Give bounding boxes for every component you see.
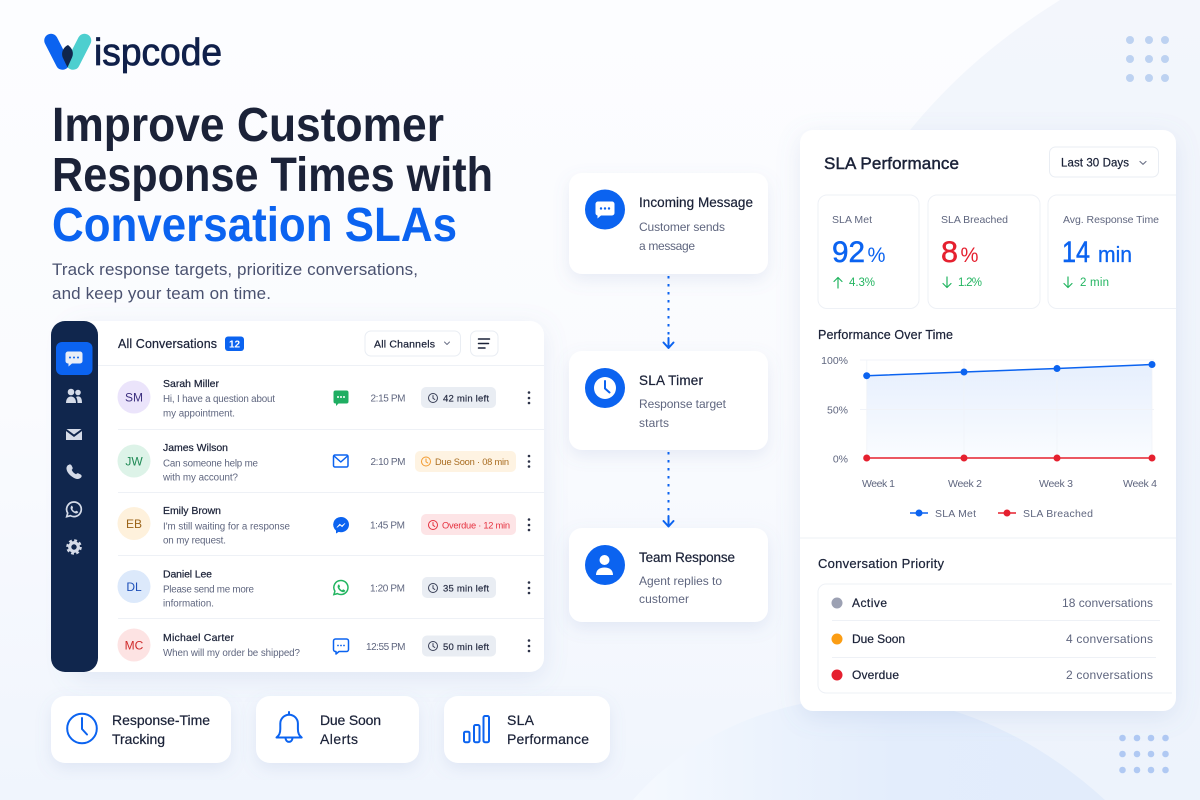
date dropdown (1050, 147, 1158, 177)
row: Daniel Lee: 35 min left (443, 584, 489, 594)
title: Conversation SLAs (52, 199, 457, 252)
feature card: response-time tracking: Response-Time (112, 712, 210, 728)
line chart: performance over time (821, 355, 1157, 490)
chart legend: SLA Met (935, 508, 976, 520)
icon: people (66, 389, 82, 403)
row: Emily Brown: 1:45 PM (370, 520, 405, 532)
row: Michael Carter: 50 min left (443, 642, 489, 653)
metric: sla breached: 1.2% (958, 277, 982, 289)
feature card: sla performance: Performance (507, 731, 589, 747)
decorative dots: top right (1126, 36, 1169, 82)
decorative dots: bottom right (1119, 735, 1169, 773)
date dropdown: Last 30 Days (1061, 158, 1129, 170)
arrow: timer to response (664, 452, 674, 526)
flow step: sla timer (569, 351, 768, 450)
row: Daniel Lee: information. (163, 598, 214, 610)
metric: sla breached: 8 (941, 236, 958, 269)
feature card: sla performance (444, 696, 610, 763)
metric: avg response time (1048, 195, 1176, 308)
subtitle (52, 260, 418, 303)
row: Emily Brown (118, 505, 530, 546)
flow step: incoming message: a message (639, 239, 695, 253)
icon: messenger (333, 517, 349, 534)
row: James Wilson: James Wilson (163, 442, 228, 454)
priority list: 2 conversations (1066, 668, 1153, 682)
subtitle: and keep your team on time. (52, 284, 271, 303)
priority list: Overdue (852, 668, 899, 682)
icon: chat (66, 352, 82, 366)
row: Daniel Lee (118, 568, 530, 610)
metric: avg response time: 2 min (1080, 277, 1109, 289)
flow step: incoming message (569, 173, 768, 274)
row: Sarah Miller: Sarah Miller (163, 378, 220, 390)
icon: phone (66, 464, 82, 479)
icon: bell (276, 712, 302, 742)
metric: sla met: 92 (832, 236, 865, 269)
metric: sla met (818, 195, 919, 308)
feature card: due soon alerts (256, 696, 419, 763)
icon: bars (464, 716, 489, 742)
icon: email (334, 455, 348, 467)
row: Sarah Miller: my appointment. (163, 408, 235, 420)
row: Emily Brown: Emily Brown (163, 505, 221, 517)
row: Michael Carter: 12:55 PM (366, 642, 406, 653)
metric: sla breached: % (960, 244, 978, 267)
row: Sarah Miller: 2:15 PM (370, 394, 406, 404)
row: Daniel Lee: DL (126, 580, 142, 594)
feature card: due soon alerts: Due Soon (320, 712, 381, 728)
row: James Wilson: 2:10 PM (370, 457, 406, 468)
metric: sla met: % (868, 244, 886, 267)
table header (118, 331, 498, 356)
icon: mail (66, 429, 82, 440)
line chart: performance over time: 50% (827, 404, 848, 416)
priority list: 4 conversations (1066, 632, 1153, 646)
priority list: Due Soon (852, 632, 905, 646)
chart heading: Performance Over Time (818, 328, 953, 342)
line chart: performance over time: Week 4 (1123, 478, 1157, 490)
flow step: sla timer: Response target (639, 397, 727, 411)
logo (51, 32, 222, 74)
row: Michael Carter (118, 628, 530, 662)
title: Response Times with (52, 149, 493, 202)
row: Sarah Miller: Hi, I have a question about (163, 394, 275, 405)
row: Emily Brown: Overdue · 12 min (442, 520, 510, 530)
icon: settings (68, 540, 80, 554)
row: James Wilson: Due Soon · 08 min (435, 457, 509, 467)
flow step: team response: Team Response (639, 550, 735, 565)
row: Michael Carter: When will my order be shipped? (163, 648, 301, 659)
flow step: sla timer: SLA Timer (639, 373, 704, 388)
feature card: due soon alerts: Alerts (320, 731, 358, 747)
icon: sms (334, 390, 348, 406)
chart legend (910, 508, 1093, 520)
row: Sarah Miller: SM (125, 390, 143, 404)
icon: whatsapp (334, 580, 348, 595)
feature card: sla performance: SLA (507, 712, 535, 728)
wordmark: ispcode (94, 32, 222, 74)
sidebar (51, 321, 98, 672)
metric: sla breached: SLA Breached (941, 214, 1008, 226)
line chart: performance over time: Week 1 (862, 478, 895, 490)
title: Improve Customer (52, 99, 444, 152)
panel: sla performance (800, 130, 1176, 711)
row: James Wilson: with my account? (162, 472, 239, 484)
row: Sarah Miller: 42 min left (443, 394, 489, 404)
metric: sla breached (928, 195, 1040, 308)
flow step: incoming message: Customer sends (639, 220, 725, 234)
metric: avg response time: 14 (1062, 236, 1090, 269)
row: Daniel Lee: Please send me more (163, 584, 255, 596)
row: Michael Carter: MC (125, 638, 144, 652)
row: James Wilson: JW (125, 454, 143, 468)
flow step: sla timer: starts (639, 416, 669, 430)
icon: whatsapp (67, 502, 81, 517)
row: Daniel Lee: Daniel Lee (163, 568, 212, 580)
metric: avg response time: min (1098, 242, 1132, 267)
row: James Wilson (118, 442, 530, 484)
priority list (818, 584, 1172, 693)
table header: 12 (229, 340, 240, 350)
table header: All Conversations (118, 337, 217, 351)
icon: clock (67, 714, 97, 743)
priority list: 18 conversations (1062, 596, 1153, 610)
metric: sla met: 4.3% (849, 277, 875, 289)
priority list: Active (852, 596, 887, 610)
title (52, 99, 493, 252)
panel heading: SLA Performance (824, 154, 959, 173)
line chart: performance over time: 100% (821, 355, 848, 367)
subtitle: Track response targets, prioritize conversations, (52, 260, 418, 279)
row: James Wilson: Can someone help me (163, 458, 259, 470)
panel: all conversations (51, 321, 544, 672)
row: Sarah Miller (118, 378, 530, 420)
flow step: team response: Agent replies to (639, 574, 722, 588)
table header: All Channels (374, 338, 435, 350)
row: Emily Brown: I'm still waiting for a response (163, 522, 291, 532)
row: Emily Brown: EB (126, 517, 142, 531)
metric: sla met: SLA Met (832, 214, 872, 226)
arrow: message to timer (664, 276, 674, 348)
row: Emily Brown: on my request. (163, 536, 226, 546)
flow step: team response (569, 528, 768, 622)
chart legend: SLA Breached (1023, 508, 1093, 520)
logo mark (51, 40, 84, 68)
metric: avg response time: Avg. Response Time (1063, 214, 1159, 226)
priority heading: Conversation Priority (818, 556, 944, 571)
feature card: response-time tracking (51, 696, 231, 763)
row: Daniel Lee: 1:20 PM (370, 584, 405, 594)
line chart: performance over time: 0% (833, 454, 848, 466)
flow step: team response: customer (639, 592, 689, 606)
row: Michael Carter: Michael Carter (163, 632, 234, 644)
flow step: incoming message: Incoming Message (639, 195, 753, 210)
line chart: performance over time: Week 2 (948, 478, 982, 490)
line chart: performance over time: Week 3 (1039, 478, 1073, 490)
feature card: response-time tracking: Tracking (112, 731, 165, 747)
icon: chat outline (334, 639, 348, 654)
